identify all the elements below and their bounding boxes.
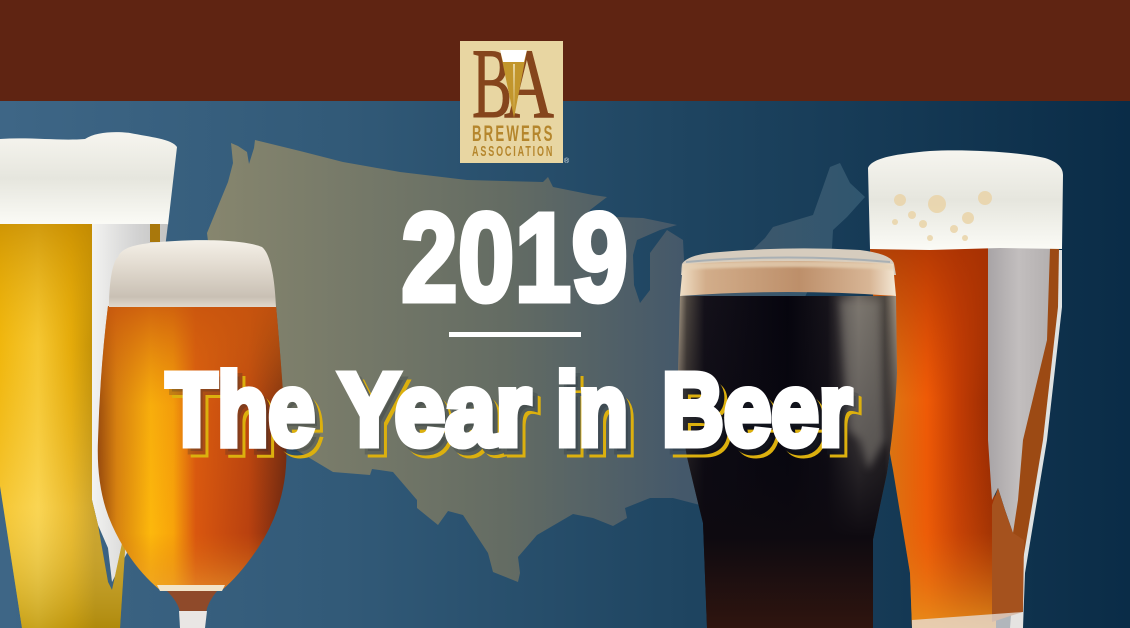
gold shadow: Beer (670, 361, 860, 476)
gold shadow (172, 376, 862, 458)
logo glass (500, 50, 527, 118)
clear glass edge: red ale (1010, 250, 1062, 628)
dark shadow: in (561, 358, 633, 473)
white title text: The (166, 352, 315, 467)
glass: red ale (868, 150, 1063, 628)
bowl base and stem (157, 585, 225, 591)
foam cream band: stout (682, 261, 894, 270)
lower beer: red ale (992, 488, 1024, 622)
beer body: stout (678, 296, 897, 628)
glass: stout (675, 248, 900, 628)
top brown band (0, 0, 1130, 101)
glass: pilsner (0, 132, 177, 628)
foam: stout (680, 261, 896, 296)
dark shadow: The (171, 358, 320, 473)
registered mark: ® (564, 157, 570, 165)
logo: Brewers Association (460, 28, 570, 165)
foam: goblet (109, 240, 276, 307)
dark shadow (171, 358, 857, 473)
logo letter A: A (504, 28, 554, 139)
gold shadow: Year (347, 361, 539, 476)
glass: goblet (98, 240, 286, 628)
dark shadow: Beer (667, 358, 857, 473)
beer bowl: goblet (98, 306, 286, 590)
rim highlight: stout (686, 258, 890, 262)
white title text (166, 352, 852, 467)
rim: stout (681, 248, 896, 275)
white title text: in (556, 352, 628, 467)
divider (449, 332, 581, 337)
title: The Year in Beer (164, 367, 862, 458)
white title text: Year (339, 352, 531, 467)
highlight on stout (840, 300, 885, 470)
foam: pilsner (0, 132, 177, 225)
gold shadow: in (564, 361, 636, 476)
glass base: red ale (912, 612, 1023, 628)
bubbles in foam (892, 191, 992, 241)
beer body: red ale (870, 248, 996, 628)
map of the United States (207, 140, 865, 582)
beer body: pilsner (0, 224, 127, 628)
gold edge strip (150, 224, 160, 242)
logo letter B: B (472, 28, 512, 139)
dark shadow: Year (344, 358, 536, 473)
foam: red ale (868, 150, 1063, 250)
logo word BREWERS: BREWERS (472, 122, 552, 146)
logo word ASSOCIATION: ASSOCIATION (472, 143, 552, 160)
beer side streak: red ale (1010, 248, 1059, 560)
glass reflection: red ale (988, 248, 1050, 533)
white title text: Beer (662, 352, 852, 467)
gold shadow: The (174, 361, 323, 476)
title: 2019: 2019 (401, 187, 628, 328)
glass reflection: pilsner (90, 224, 168, 582)
